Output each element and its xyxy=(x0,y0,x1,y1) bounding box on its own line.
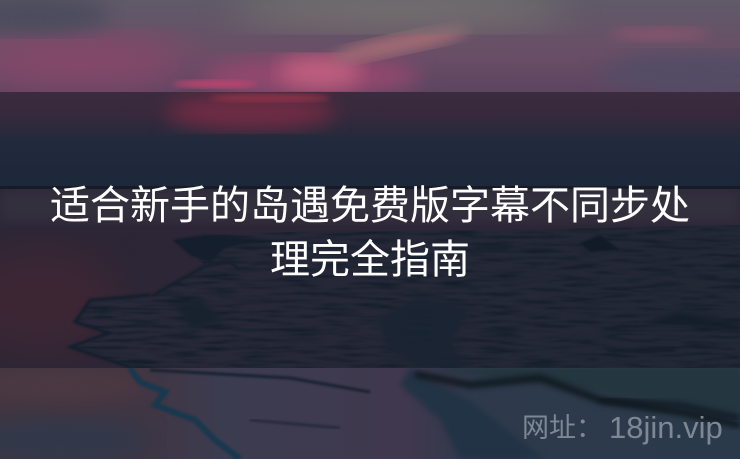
title line 1: 适合新手的岛遇免费版字幕不同步处 xyxy=(50,184,690,228)
sky xyxy=(0,0,740,96)
watermark: website address: 18jin.vip xyxy=(609,410,723,445)
wet beach xyxy=(0,186,740,370)
title line 2: 理完全指南 xyxy=(270,238,470,282)
water foam area xyxy=(76,225,740,368)
lower beach lighter band xyxy=(0,367,740,459)
watermark: website address: 网址： xyxy=(522,413,603,443)
watermark: website address xyxy=(522,410,723,445)
sea at horizon xyxy=(0,92,740,138)
